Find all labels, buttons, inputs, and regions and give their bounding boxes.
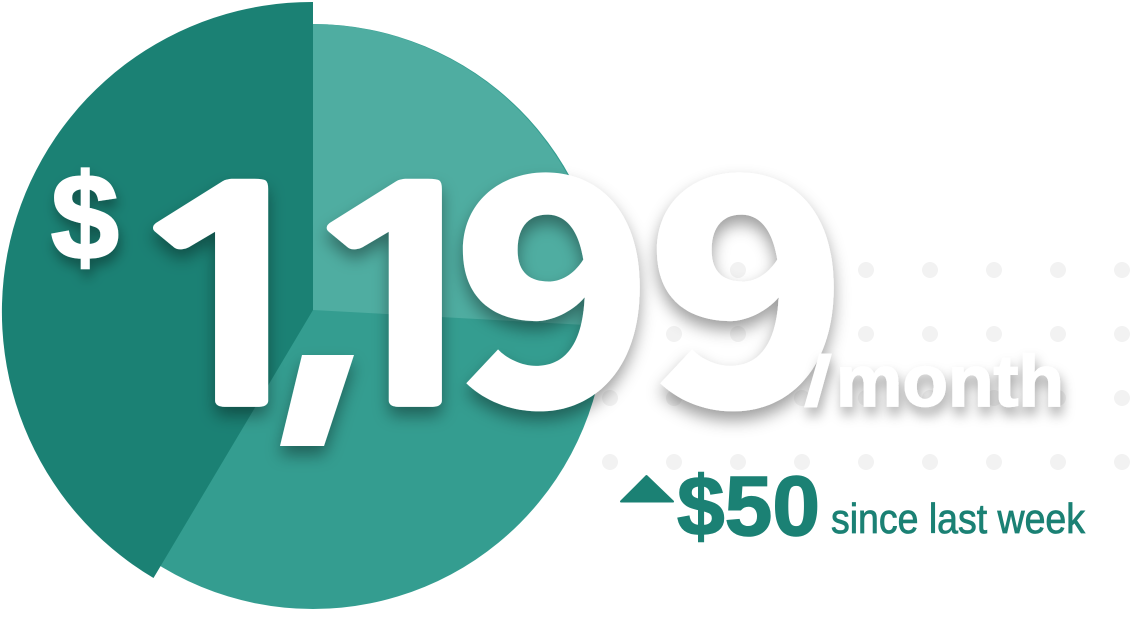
change indicator [621, 459, 1086, 553]
pie chart [2, 2, 605, 609]
dot grid background [602, 262, 1130, 470]
icon: up triangle [621, 476, 673, 502]
main price figure: 1 [275, 157, 537, 448]
main price figure: 9 [644, 40, 850, 499]
change amount: $50 [677, 459, 820, 553]
pie segment: medium teal [20, 24, 606, 609]
main price figure: 1 [101, 157, 363, 448]
pie segment: light teal [313, 24, 604, 326]
main price figure: 9 [450, 40, 656, 499]
change caption: since last week [831, 495, 1086, 542]
main price figure [150, 171, 844, 464]
pie segment: dark teal [2, 2, 313, 578]
per month label: month [836, 342, 1064, 422]
dollar sign: $ [51, 149, 119, 285]
per month label: / [803, 342, 833, 422]
